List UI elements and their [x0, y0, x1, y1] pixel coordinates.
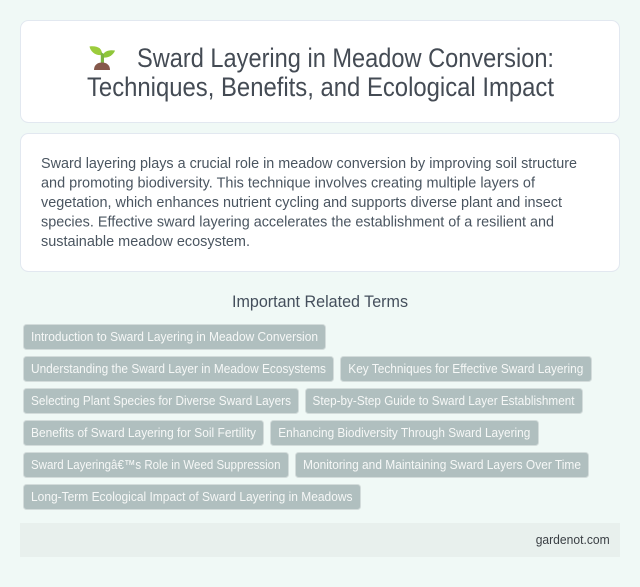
tag: selecting species	[24, 388, 298, 414]
tag: weed suppression	[24, 452, 288, 478]
tag: long-term impact: Long-Term Ecological Impact of Sward Layering in Meadows	[31, 489, 353, 504]
tag: understanding: Understanding the Sward Layer in Meadow Ecosystems	[31, 361, 326, 376]
tag: introduction	[24, 324, 326, 350]
title: Techniques, Benefits, and Ecological Impact	[87, 72, 555, 102]
tag: biodiversity: Enhancing Biodiversity Through Sward Layering	[278, 425, 530, 440]
text block: summary: Sward layering plays a crucial role in meadow conversion by improving soil structure	[41, 155, 577, 172]
tag: monitoring: Monitoring and Maintaining Sward Layers Over Time	[303, 457, 581, 472]
tag list	[24, 324, 592, 510]
tag: selecting species: Selecting Plant Species for Diverse Sward Layers	[31, 393, 291, 408]
tag: key techniques	[340, 356, 592, 382]
footer source text: gardenot.com	[536, 532, 610, 547]
tag: monitoring	[296, 452, 588, 478]
text block: summary: and promoting biodiversity. This technique involves creating multiple layers of	[41, 174, 536, 192]
tag: biodiversity	[270, 420, 538, 446]
text block: summary: sustainable meadow ecosystem.	[41, 233, 250, 250]
text block: summary: vegetation, which enhances nutrient cycling and supports diverse plant and insect	[41, 194, 563, 211]
panel: introduction text	[20, 134, 620, 272]
text block: summary: species. Effective sward layering accelerates the establishment of a resilient and	[41, 214, 554, 230]
tag: weed suppression: Sward Layeringâ€™s Role in Weed Suppression	[31, 457, 280, 472]
tag: understanding	[24, 356, 334, 382]
title: Sward Layering in Meadow Conversion:	[137, 43, 554, 73]
tag: benefits: Benefits of Sward Layering for Soil Fertility	[31, 425, 256, 440]
text block: summary	[41, 155, 577, 250]
title	[87, 43, 555, 102]
heading: related terms: Important Related Terms	[232, 293, 408, 311]
tag: key techniques: Key Techniques for Effective Sward Layering	[348, 361, 583, 376]
tag: long-term impact	[24, 484, 360, 510]
footer	[20, 523, 620, 557]
tag: benefits	[24, 420, 264, 446]
tag: introduction: Introduction to Sward Layering in Meadow Conversion	[31, 329, 318, 344]
panel: header	[20, 20, 620, 122]
icon: sprout	[90, 46, 115, 70]
tag: step-by-step	[306, 388, 582, 414]
tag: step-by-step: Step-by-Step Guide to Sward Layer Establishment	[312, 393, 575, 408]
